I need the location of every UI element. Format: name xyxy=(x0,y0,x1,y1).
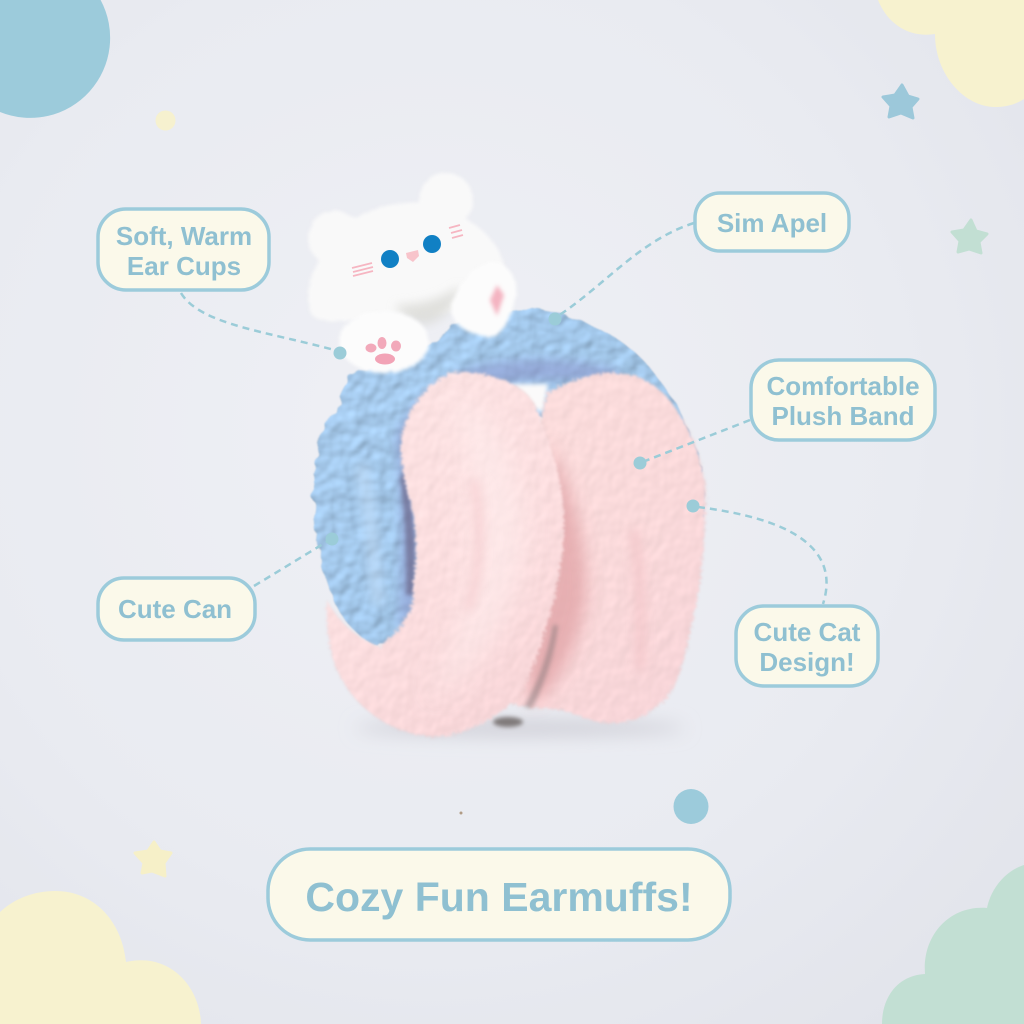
callout: Cute Can xyxy=(98,532,338,640)
callout: Comfortable Plush Band xyxy=(634,360,935,470)
callout: Soft, Warm Ear Cups: Soft, Warm xyxy=(116,221,252,251)
icon: green star xyxy=(952,220,987,253)
callout: Cute Can: Cute Can xyxy=(118,594,232,624)
dark stub at base xyxy=(493,717,523,727)
callout: Comfortable Plush Band: Comfortable xyxy=(766,371,920,401)
cup highlight xyxy=(430,400,525,700)
decoration: bottom-right green cloud xyxy=(882,865,1024,1024)
icon: blue star xyxy=(883,85,918,118)
callout: Cute Cat Design!: Cute Cat xyxy=(754,617,861,647)
cat body and ears xyxy=(308,173,504,322)
eyes xyxy=(381,250,399,268)
decoration: top-right cream cloud xyxy=(878,0,1024,107)
cup crease line xyxy=(468,480,479,610)
decoration: top-left blue circle xyxy=(0,0,110,118)
decoration: bottom-left cream cloud xyxy=(0,891,201,1024)
speck on floor xyxy=(460,812,462,814)
decoration: blue dot xyxy=(674,789,708,824)
right ear cup xyxy=(500,373,706,723)
callout: Sim Apel: Sim Apel xyxy=(717,208,827,238)
cat plush xyxy=(308,173,516,373)
nose xyxy=(406,250,419,262)
callout: Sim Apel xyxy=(548,193,849,326)
white patch between cups xyxy=(512,384,548,412)
cat fur shading xyxy=(395,285,460,325)
title banner xyxy=(268,849,730,940)
cup crease dark xyxy=(524,625,558,708)
left paw xyxy=(339,311,429,373)
product: plush earmuffs xyxy=(308,173,706,814)
callout: Cute Cat Design!: Design! xyxy=(759,647,855,677)
band gap dark xyxy=(400,470,415,595)
callout: Cute Cat Design! xyxy=(686,500,878,686)
title banner: Cozy Fun Earmuffs! xyxy=(305,874,693,920)
callout: Soft, Warm Ear Cups: Ear Cups xyxy=(127,251,241,281)
blue headband xyxy=(313,308,704,648)
floor shadow xyxy=(355,720,685,736)
front ear cup xyxy=(327,372,564,737)
callout: Comfortable Plush Band: Plush Band xyxy=(771,401,915,431)
band inner shade xyxy=(396,360,620,630)
cheeks xyxy=(352,225,463,276)
cup crease shade xyxy=(528,440,586,705)
band highlight ridge xyxy=(362,470,378,600)
decoration: small cream dot xyxy=(156,110,176,130)
icon: cream star xyxy=(135,842,171,876)
cup crease line xyxy=(634,530,641,670)
callout: Soft, Warm Ear Cups xyxy=(98,209,346,360)
right paw xyxy=(452,262,516,337)
